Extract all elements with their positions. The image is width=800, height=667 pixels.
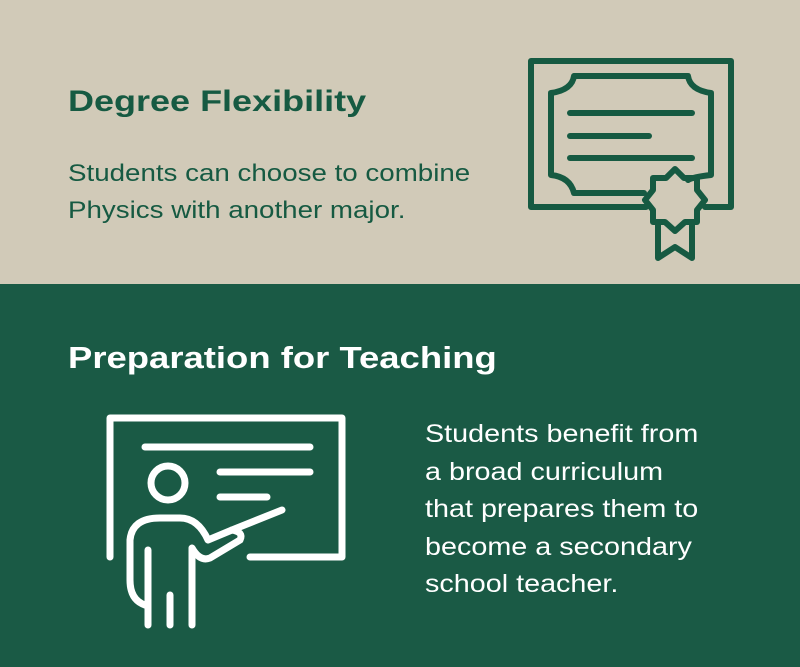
text block: teaching: a broad curriculum (425, 458, 663, 486)
panel: preparation for teaching (0, 284, 800, 667)
text block: degree flexibility: Physics with another major. (68, 197, 405, 224)
icon: certificate (528, 58, 734, 261)
text block: degree flexibility: Students can choose to combine (68, 160, 470, 187)
panel: degree flexibility (0, 0, 800, 284)
text block: teaching (425, 420, 698, 598)
text block: teaching: become a secondary (425, 532, 692, 560)
text block: degree flexibility (68, 160, 470, 224)
text block: teaching: that prepares them to (425, 495, 698, 523)
text block: teaching: Students benefit from (425, 420, 698, 448)
heading: preparation for teaching: Preparation for Teaching (68, 340, 497, 375)
text block: teaching: school teacher. (425, 570, 618, 598)
heading: degree flexibility: Degree Flexibility (68, 85, 366, 118)
icon: teacher at board (106, 414, 346, 628)
